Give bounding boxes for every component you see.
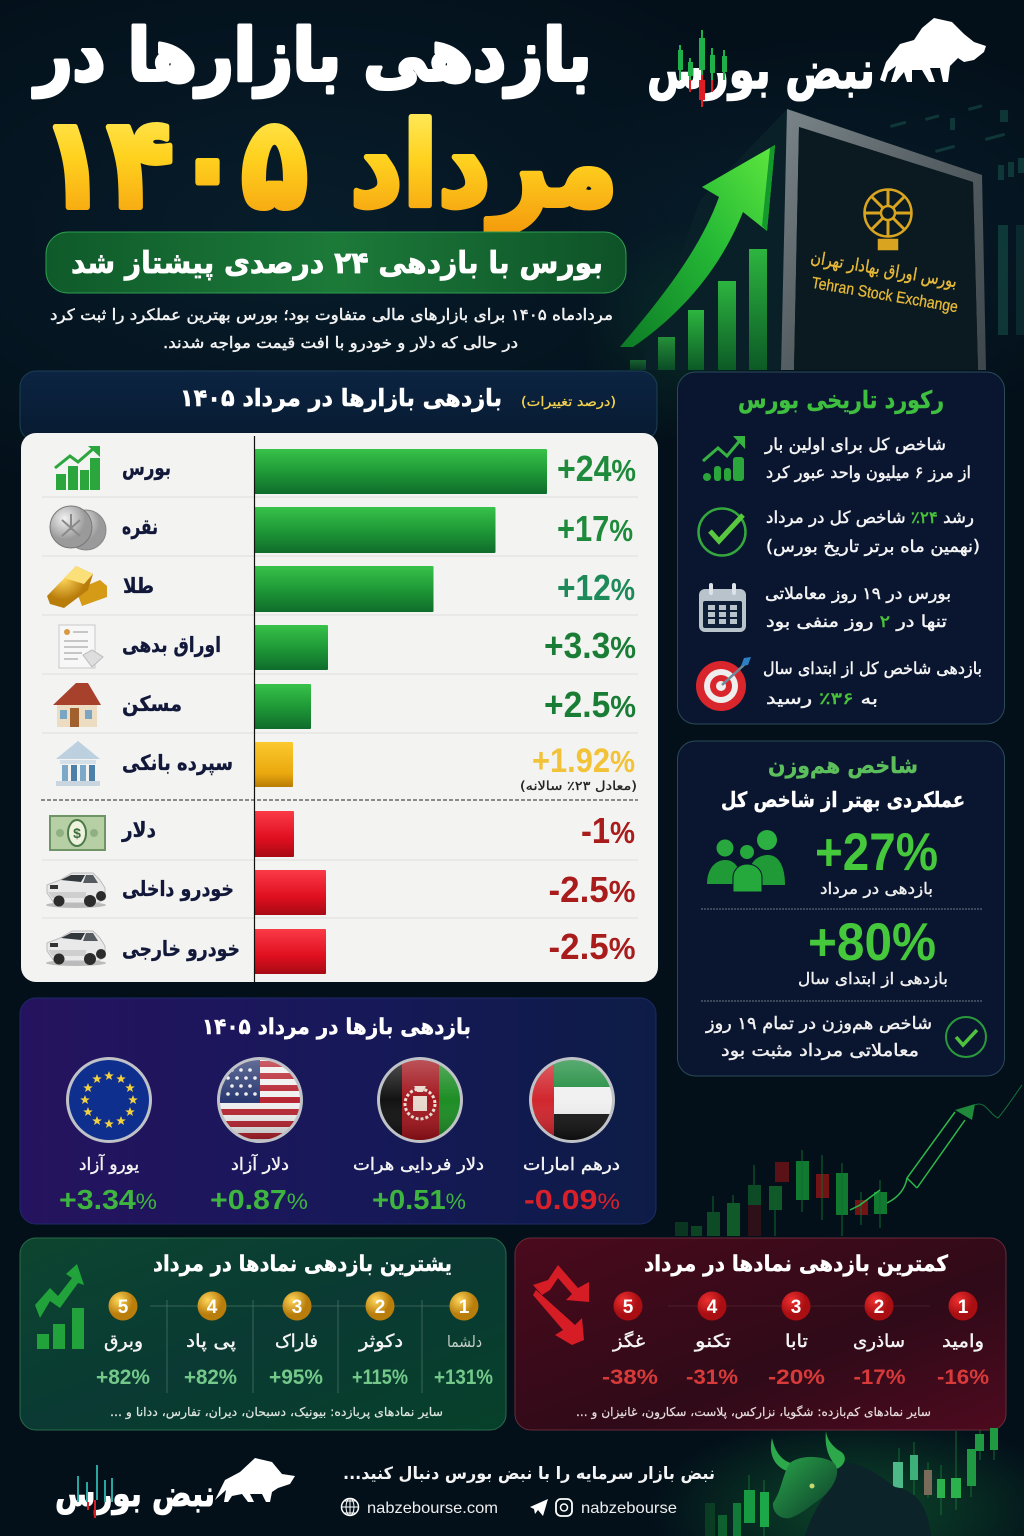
icon: chart [55,446,100,490]
footer logo: نبض بورس [55,1474,215,1515]
rank badges: 5 [118,1297,129,1318]
currency names: درهم امارات [523,1155,620,1175]
symbol names [104,1331,482,1352]
symbol values: -17% [854,1366,906,1389]
other losers note: سایر نمادهای کم‌بازده: شگویا، نزارکس، پلاست، سکارون، غانیزان و ... [576,1405,931,1420]
rank badges [614,1292,978,1320]
rank badges: 4 [707,1297,718,1318]
logo: top [647,18,986,107]
icon: people [707,830,785,892]
currency names: دلار آزاد [231,1153,289,1175]
icon: dollar note [50,816,105,850]
icon: exchange emblem [864,190,912,249]
panel: currency returns [20,998,656,1224]
symbol values: -20% [768,1366,825,1389]
panel heading: کمترین بازدهی نمادها در مرداد [644,1252,948,1277]
row values: +1.92% [532,742,635,780]
rank badges: 1 [459,1297,470,1318]
exchange name persian: بورس اوراق بهادار تهران [809,248,958,292]
note: معاملاتی مرداد مثبت بود [721,1041,919,1061]
social contact: nabzebourse [581,1500,677,1517]
rank badges: 3 [292,1297,302,1318]
rank badges: 4 [207,1297,218,1318]
website contact: nabzebourse.com [367,1500,498,1517]
row labels [121,456,240,961]
panel: top gainers [20,1238,506,1430]
growth bars and arrow [620,145,775,370]
record item texts: (نهمین ماه برتر تاریخ بورس) [766,537,980,557]
panel heading: رکورد تاریخی بورس [738,386,944,414]
row labels: دلار [121,818,156,842]
row labels: بورس [122,456,171,480]
row values: -2.5% [548,869,636,910]
panel heading: شاخص هم‌وزن [768,754,918,779]
currency values: -0.09 % [524,1184,620,1215]
symbol values: +115% [352,1366,408,1389]
currency values: +0.87 % [210,1184,308,1215]
row values: +17% [557,508,633,549]
symbol values: +131% [434,1366,493,1389]
background candles [675,1085,1022,1236]
symbol names: دکوثر [358,1331,403,1352]
exchange name english: Tehran Stock Exchange [810,275,959,316]
row labels: خودرو خارجی [122,937,240,961]
panel heading: یشترین بازدهی نمادها در مرداد [153,1252,452,1277]
row values: +12% [557,567,635,608]
row values: +3.3% [544,625,636,666]
title: second line [40,90,618,237]
currency values: +3.34 % [59,1184,157,1215]
icon: gold bars [47,566,107,608]
row labels: خودرو داخلی [122,877,234,901]
rank badges: 3 [791,1297,801,1318]
intro paragraph [50,306,613,353]
panel: historic record [678,372,1004,724]
icon: target [696,657,751,711]
icon: green arrows [35,1264,84,1349]
title: second line: مرداد [350,98,618,234]
icon: calendar [699,583,746,632]
panel: equal weight index [678,741,1004,1076]
symbol names: وامید [942,1331,984,1352]
rank badges [108,1292,478,1320]
row labels: اوراق بدهی [122,633,221,657]
rank badges: 2 [375,1297,385,1318]
row labels: طلا [123,574,154,598]
icon: red arrows [533,1265,589,1345]
title: second line: ۱۴۰۵ [40,90,308,237]
chart header: بازدهی بازارها در مرداد ۱۴۰۵ [180,384,502,412]
row values: -1% [581,810,635,851]
rank badges: 1 [958,1297,969,1318]
record item texts: از مرز ۶ میلیون واحد عبور کرد [766,463,971,483]
note: شاخص هم‌وزن در تمام ۱۹ روز [705,1014,932,1034]
symbol values [96,1366,493,1389]
social contact [530,1499,677,1517]
footer logo [55,1458,295,1518]
record item texts: تنها در ۲ روز منفی بود [766,612,947,632]
bars [254,449,547,974]
logo: top: نبض بورس [647,41,875,101]
currency names: دلار فردایی هرات [353,1155,484,1175]
row labels: مسکن [122,692,182,716]
currency names [79,1153,620,1175]
symbol names: ساذری [853,1331,905,1352]
record item texts: بازدهی شاخص کل از ابتدای سال [763,659,982,679]
symbol values: +82% [184,1366,237,1389]
note [705,1014,932,1061]
symbol names: غگز [612,1330,645,1352]
stat: 27 percent: +27% [815,823,938,882]
symbol names: تکنو [694,1331,731,1352]
headline pill: بورس با بازدهی ۲۴ درصدی پیشتاز شد [71,246,603,281]
symbol values [602,1366,989,1389]
icon: growth [703,436,745,481]
exchange building [640,109,986,370]
row labels: نقره [122,515,158,539]
stat caption: بازدهی از ابتدای سال [798,969,948,989]
currency values: +0.51% [372,1184,466,1215]
currency values [59,1184,620,1215]
currency names: یورو آزاد [79,1153,139,1175]
record item texts [763,435,982,709]
symbol values: +95% [269,1366,323,1389]
symbol names [612,1330,984,1352]
row labels: سپرده بانکی [122,751,233,775]
other gainers note: سایر نمادهای پربازده: بیونیک، دسبحان، دیران، تفارس، ددانا و ... [110,1405,443,1420]
icon: foreign car [46,931,106,966]
flag: EU [66,1057,152,1143]
headline pill [46,232,626,293]
panel heading: بازدهی بازها در مرداد ۱۴۰۵ [202,1015,471,1040]
panel: market returns chart [20,371,658,982]
chart header [20,371,657,441]
flag: UAE [529,1057,615,1143]
row values: (معادل ۲۳٪ سالانه) [520,778,637,793]
symbol names: پی پاد [186,1331,236,1352]
panel: top losers [515,1238,1006,1430]
row values [520,448,637,967]
intro paragraph: در حالی که دلار و خودرو با افت قیمت مواجه شدند. [163,334,518,353]
stat caption: بازدهی در مرداد [820,879,933,899]
record item texts: به ۳۶٪ رسید [766,689,878,709]
rank badges: 5 [623,1297,634,1318]
record item texts: بورس در ۱۹ روز معاملاتی [765,584,951,604]
icon: bond document [59,625,103,668]
flag: Afghanistan [377,1057,463,1143]
footer bull and candles [705,1428,998,1536]
icon: dollar note: $ [73,825,81,841]
footer tagline: نبض بازار سرمایه را با نبض بورس دنبال کنید... [343,1464,715,1484]
symbol values: -38% [602,1366,658,1389]
intro paragraph: مردادماه ۱۴۰۵ برای بازارهای مالی متفاوت بود؛ بورس بهترین عملکرد را ثبت کرد [50,306,613,325]
icon: domestic car [46,873,106,908]
record item texts: رشد ۲۴٪ شاخص کل در مرداد [766,508,974,528]
row values: +24% [557,448,636,489]
panel subheading: عملکردی بهتر از شاخص کل [721,788,965,812]
icon: house [53,683,101,727]
icon: check circle [946,1017,986,1057]
icon: silver coins [50,506,106,550]
row values: +2.5% [544,684,636,725]
symbol names: وبرق [104,1331,143,1352]
flag: USA [217,1057,303,1143]
symbol names: دلشما [447,1332,482,1351]
icon: check circle [698,508,746,556]
symbol values: -31% [686,1366,738,1389]
row values: -2.5% [548,926,636,967]
chart header: (درصد تغییرات) [521,395,616,410]
stat: 80 percent: +80% [808,913,936,972]
symbol names: فاراک [275,1331,318,1352]
rank badges: 2 [874,1297,884,1318]
title: first line: بازدهی بازارها در [33,13,591,98]
symbol values: +82% [96,1366,150,1389]
icon: bank [56,741,100,786]
record item texts: شاخص کل برای اولین بار [764,435,946,455]
symbol names: تابا [785,1331,808,1352]
symbol values: -16% [937,1366,989,1389]
